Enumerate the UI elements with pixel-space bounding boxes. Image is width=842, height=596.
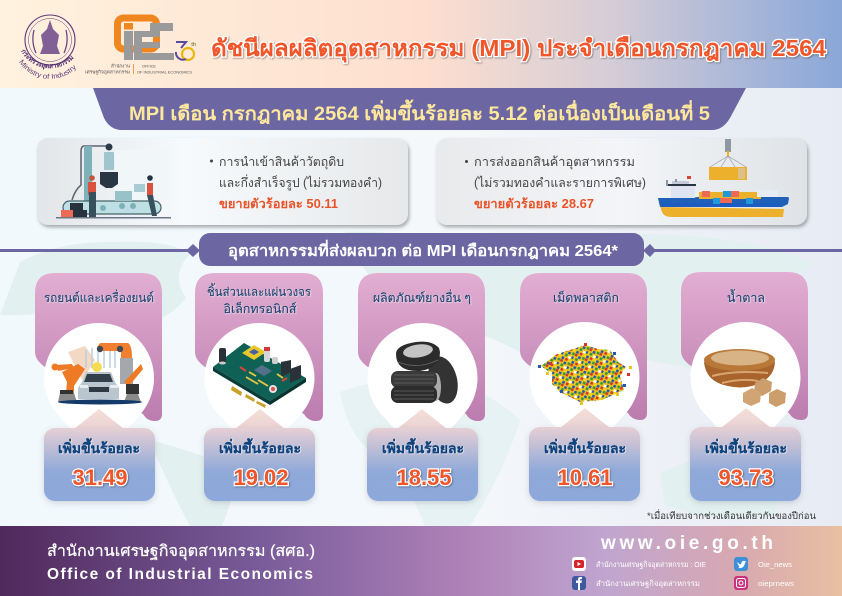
card: plastic pellets — [520, 273, 647, 501]
organisation name: Office of Industrial Economics — [47, 566, 313, 583]
logo: OIE: th — [191, 42, 196, 48]
stat box: 19.02 — [233, 465, 289, 490]
card: electronics: ชิ้นส่วนและแผ่นวงจร — [207, 283, 312, 299]
logo: Ministry of Industry seal: กระทรวงอุตสาหกรรม — [21, 50, 74, 70]
logo: OIE: OFFICE — [142, 64, 156, 68]
panel: exports: ขยายตัวร้อยละ 28.67 — [474, 197, 594, 211]
card: sugar: น้ำตาล — [727, 289, 765, 305]
logo: Ministry of Industry seal — [19, 14, 76, 79]
stat box: เพิ่มขึ้นร้อยละ — [58, 438, 140, 456]
panel: exports — [436, 138, 807, 225]
stat box: เพิ่มขึ้นร้อยละ — [544, 438, 626, 456]
background — [0, 88, 842, 528]
footer — [0, 526, 842, 596]
heading: positive industries: อุตสาหกรรมที่ส่งผลบวก ต่อ MPI เดือนกรกฎาคม 2564* — [228, 239, 619, 261]
card: electronics: อิเล็กทรอนิกส์ — [224, 301, 297, 316]
icon: youtube — [572, 557, 586, 571]
stat box — [529, 408, 640, 501]
icon: cargo ship — [658, 139, 789, 217]
stat box — [44, 409, 155, 501]
stat box — [690, 408, 801, 501]
card: sugar — [681, 272, 808, 501]
card: plastic pellets: เม็ดพลาสติก — [553, 290, 619, 305]
stat box: 10.61 — [557, 465, 613, 490]
panel: exports: การส่งออกสินค้าอุตสาหกรรม — [474, 155, 635, 170]
logo: OIE: สำนักงาน — [111, 62, 130, 68]
stat box — [204, 409, 315, 501]
icon: factory conveyor — [56, 144, 171, 218]
card: electronics — [195, 273, 323, 501]
divider line with diamonds — [0, 244, 842, 257]
card: rubber products — [358, 273, 485, 501]
panel: imports: ขยายตัวร้อยละ 50.11 — [219, 197, 338, 211]
logo: OIE: OF INDUSTRIAL ECONOMICS — [137, 70, 192, 74]
stat box: 18.55 — [396, 465, 452, 490]
footnote: *เมื่อเทียบจากช่วงเดือนเดียวกันของปีก่อน — [647, 509, 817, 522]
panel: imports: การนำเข้าสินค้าวัตถุดิบ — [219, 155, 344, 170]
stat box: เพิ่มขึ้นร้อยละ — [705, 438, 787, 456]
stat box: 93.73 — [718, 465, 774, 490]
icon: facebook — [572, 576, 586, 590]
organisation name: สำนักงานเศรษฐกิจอุตสาหกรรม (สศอ.) — [47, 543, 315, 561]
card: automobiles — [35, 273, 162, 501]
logo: OIE: เศรษฐกิจอุตสาหกรรม — [85, 70, 130, 76]
panel: imports — [37, 138, 408, 225]
card: automobiles: รถยนต์และเครื่องยนต์ — [44, 289, 154, 305]
panel: exports: (ไม่รวมทองคำและรายการพิเศษ) — [474, 176, 646, 190]
icon: twitter — [734, 557, 748, 571]
website: www.oie.go.th — [600, 533, 773, 554]
card: rubber products: ผลิตภัณฑ์ยางอื่น ๆ — [373, 289, 471, 305]
footer: สำนักงานเศรษฐกิจอุตสาหกรรม : OIE — [596, 560, 706, 569]
icon: car factory robots — [52, 343, 143, 404]
stat box: เพิ่มขึ้นร้อยละ — [382, 438, 464, 456]
footer: สำนักงานเศรษฐกิจอุตสาหกรรม — [596, 579, 700, 588]
logo: OIE — [85, 18, 196, 76]
banner: headline — [93, 88, 746, 130]
icon: sugar bowl — [704, 349, 786, 407]
banner: headline: MPI เดือน กรกฎาคม 2564 เพิ่มขึ้นร้อยละ 5.12 ต่อเนื่องเป็นเดือนที่ 5 — [129, 99, 710, 125]
header band — [0, 0, 842, 88]
stat box: เพิ่มขึ้นร้อยละ — [219, 438, 301, 456]
icon: circuit board — [213, 343, 306, 408]
footer: Oie_news — [758, 560, 792, 569]
title: ดัชนีผลผลิตอุตสาหกรรม (MPI) ประจำเดือนกรกฎาคม 2564 — [211, 35, 826, 63]
stat box — [367, 409, 478, 501]
icon: plastic pellets — [538, 343, 632, 405]
icon: instagram — [734, 576, 748, 590]
stat box: 31.49 — [72, 465, 128, 490]
panel: imports: และกึ่งสำเร็จรูป (ไม่รวมทองคำ) — [219, 174, 382, 191]
heading: positive industries — [199, 233, 644, 266]
logo: Ministry of Industry seal: Ministry of Industry — [19, 60, 76, 79]
footer: oieprnews — [758, 579, 794, 588]
icon: tyres — [391, 342, 462, 407]
organisation name — [47, 543, 315, 583]
